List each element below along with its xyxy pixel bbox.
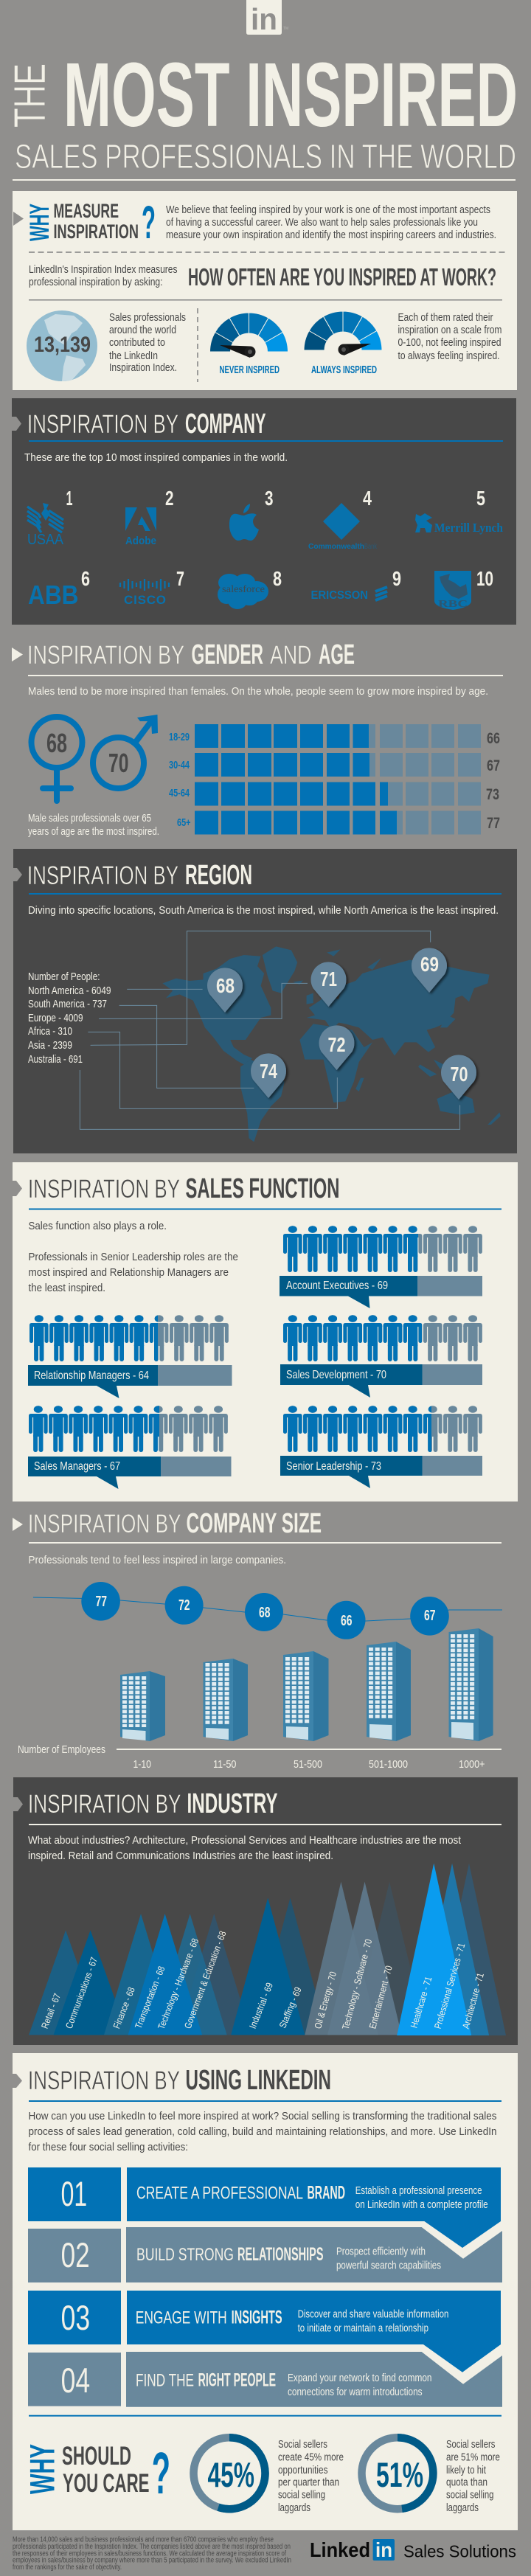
arrow — [13, 2074, 22, 2088]
pictogram: Sales Development 70 — [280, 1315, 482, 1398]
section: inspiration by gender and age — [12, 639, 503, 838]
pictogram: Account Executives 69 — [280, 1226, 482, 1308]
labels: industries: Communications - 67 — [63, 1956, 100, 2030]
text: number of people: Asia - 2399 — [28, 1039, 72, 1052]
pictogram: Sales Managers 67: Sales Managers - 67 — [34, 1460, 120, 1473]
text: rating scale: inspiration on a scale from — [398, 324, 502, 336]
text: sales function intro — [28, 1220, 238, 1294]
heading: sales function — [28, 1173, 339, 1204]
connector lines — [80, 931, 460, 1129]
point 67 — [410, 1597, 449, 1636]
text: 51% description: likely to hit — [446, 2464, 487, 2476]
step 01: CREATE A PROFESSIONAL — [136, 2184, 303, 2204]
bar row 45-64 — [169, 782, 499, 805]
panel: inspiration by sales function — [13, 1162, 518, 1501]
icon: female symbol 68 — [31, 717, 83, 801]
step 03 — [28, 2291, 501, 2372]
step 03: to initiate or maintain a relationship — [298, 2322, 428, 2335]
step 02 — [28, 2227, 502, 2282]
logo: Commonwealth Bank: Bank — [364, 542, 378, 551]
labels: industries: Staffing - 69 — [277, 1985, 304, 2030]
icon: male symbol 70 — [93, 715, 158, 788]
pin: Asia 69: 69 — [420, 953, 439, 976]
text: industry intro: inspired. Retail and Communications Industries are the least inspired. — [28, 1850, 333, 1862]
text: index description — [29, 263, 177, 288]
logo: Cisco — [120, 579, 169, 607]
logo: LinkedIn Sales Solutions — [310, 2538, 516, 2561]
text: sales professionals: the LinkedIn — [109, 350, 158, 362]
step 01: BRAND — [307, 2183, 345, 2204]
axis labels: 51-500 — [294, 1758, 322, 1771]
axis labels: 501-1000 — [369, 1758, 408, 1771]
building 1000+ — [448, 1628, 493, 1741]
labels: industries: Oil & Energy - 70 — [312, 1971, 339, 2030]
heading: gender and age: AND — [270, 641, 311, 670]
logo: Merrill Lynch — [415, 513, 503, 535]
point 66 — [327, 1601, 366, 1639]
heading: region: INSPIRATION BY — [27, 861, 178, 890]
pin: Africa 72 — [319, 1025, 354, 1070]
text: rating scale: 0-100, not feeling inspired — [398, 336, 502, 349]
text: index description: LinkedIn's Inspiration Index measures — [29, 263, 177, 276]
pin: Europe 71: 71 — [320, 968, 337, 990]
donut: 51% — [361, 2437, 434, 2509]
bar row 30-44 — [169, 753, 500, 777]
logo: Commonwealth Bank: Commonwealth — [308, 542, 364, 551]
logo: Adobe — [125, 507, 156, 547]
building 1-10 — [120, 1671, 165, 1741]
rank 7: 7 — [176, 567, 184, 590]
text: methodology note: the responses of their employees in sales/business functions. We calculated the average inspiration score of — [13, 2549, 286, 2558]
pictogram: Account Executives 69: Account Executives - 69 — [286, 1280, 388, 1292]
axis labels: 1000+ — [459, 1758, 485, 1771]
line chart — [33, 1582, 502, 1639]
building 11-50 — [204, 1659, 248, 1741]
pin: South America 74 — [251, 1053, 286, 1098]
heading: why measure inspiration: INSPIRATION — [53, 221, 139, 243]
pin: Australia 70: 70 — [450, 1063, 468, 1086]
logo: ABB: ABB — [28, 580, 78, 610]
text: 51% description — [446, 2438, 500, 2514]
section: inspiration by company size — [13, 1508, 502, 1771]
panel: inspiration by industry — [13, 1777, 518, 2045]
step 02: powerful search capabilities — [336, 2260, 441, 2272]
gauge: always inspired: ALWAYS INSPIRED — [311, 364, 377, 376]
text: 45% description: social selling — [278, 2489, 325, 2502]
point 77 — [81, 1582, 120, 1621]
heading: why measure inspiration — [24, 197, 156, 249]
panel: inspiration by company — [12, 398, 516, 625]
text: sales function intro: the least inspired. — [28, 1282, 105, 1294]
text: number of people: South America - 737 — [28, 998, 107, 1010]
text: methodology note: More than 14,000 sales and business professionals and more than 6700 companies who employ these — [13, 2536, 274, 2544]
heading: company size: INSPIRATION BY — [28, 1510, 181, 1538]
text: sales function intro: most inspired and Relationship Managers are — [28, 1266, 229, 1279]
donut: 45% — [193, 2437, 266, 2509]
heading: using linkedin: USING LINKEDIN — [186, 2065, 331, 2096]
heading: why should you care: WHY — [22, 2444, 62, 2494]
icon: LinkedIn logo: in — [251, 2, 277, 36]
text: sales function intro: Sales function also plays a role. — [28, 1220, 167, 1232]
donut: 51%: 51% — [376, 2455, 423, 2494]
step 04: RIGHT PEOPLE — [198, 2370, 276, 2391]
gauge: never inspired: NEVER INSPIRED — [220, 364, 280, 376]
icon: male symbol 70: 70 — [108, 748, 128, 778]
text: company size intro: Professionals tend to feel less inspired in large companies. — [28, 1554, 286, 1566]
point 72: 72 — [178, 1597, 190, 1614]
labels: industries: Government & Education - 68 — [182, 1929, 229, 2030]
heading: region: REGION — [185, 860, 252, 891]
text: industry intro: What about industries? Architecture, Professional Services and Healthcare industries are the most — [28, 1834, 462, 1847]
panel: why measure inspiration — [13, 191, 517, 390]
icon: LinkedIn logo: TM — [283, 27, 288, 31]
panel: inspiration by using linkedin — [13, 2053, 518, 2530]
pin: Australia 70 — [441, 1055, 476, 1100]
axis labels: 11-50 — [213, 1758, 236, 1771]
text: rating scale — [398, 311, 502, 362]
icon: LinkedIn logo — [246, 0, 288, 36]
heading: gender and age: GENDER — [192, 639, 263, 670]
heading: company: INSPIRATION BY — [27, 410, 178, 439]
step 01: Establish a professional presence — [355, 2184, 482, 2197]
logo: Ericsson: ERICSSON — [311, 589, 368, 602]
rank 10: 10 — [476, 567, 493, 590]
point 67: 67 — [424, 1608, 435, 1624]
text: 45% description: opportunities — [278, 2464, 327, 2476]
step 04 — [28, 2352, 502, 2407]
text: number of people: Europe - 4009 — [28, 1012, 83, 1024]
arrow — [13, 1181, 22, 1196]
step 02: BUILD STRONG — [136, 2245, 234, 2265]
icon: globe with number: 13,139 — [34, 333, 91, 357]
step 04: Expand your network to find common — [288, 2372, 432, 2384]
icon: female symbol 68: 68 — [46, 728, 67, 758]
text: male over 65: years of age are the most inspired. — [28, 825, 159, 838]
logo: LinkedIn Sales Solutions: Linked — [310, 2538, 370, 2561]
heading: why measure inspiration: MEASURE — [53, 200, 119, 222]
step 04: connections for warm introductions — [288, 2386, 423, 2398]
logo: Salesforce — [218, 574, 268, 609]
map: world — [162, 946, 501, 1142]
pictogram: Senior Leadership 73: Senior Leadership - 73 — [286, 1460, 381, 1473]
chart: age bars — [169, 724, 500, 835]
text: axis label: Number of Employees — [18, 1743, 105, 1756]
point 77: 77 — [96, 1594, 107, 1610]
text: number of people: North America - 6049 — [28, 985, 111, 997]
heading: sales function: SALES FUNCTION — [186, 1173, 339, 1204]
bar row 65+ — [177, 811, 500, 835]
bar row 65+: 65+ — [177, 816, 191, 829]
text: sales function intro: Professionals in Senior Leadership roles are the — [28, 1251, 238, 1263]
bar row 30-44: 30-44 — [169, 759, 190, 771]
heading: why should you care: SHOULD — [62, 2442, 131, 2471]
text: 45% description: per quarter than — [278, 2476, 339, 2489]
labels: industries: Technology - Hardware - 68 — [156, 1937, 201, 2031]
arrow — [13, 1797, 23, 1811]
logo: Commonwealth Bank — [308, 503, 378, 551]
step 02: Prospect efficiently with — [336, 2246, 426, 2258]
rank 6: 6 — [81, 567, 90, 590]
text: 51% description: are 51% more — [446, 2451, 500, 2464]
step 01 — [28, 2167, 501, 2248]
pictogram: Sales Development 70: Sales Development - 70 — [286, 1369, 386, 1381]
rank 1: 1 — [66, 487, 72, 510]
panel: inspiration by region — [13, 849, 517, 1153]
logo: RBC — [434, 571, 471, 610]
gauge: never inspired — [209, 313, 288, 376]
bar row 45-64: 73 — [486, 786, 499, 803]
labels: industries: Entertainment - 70 — [367, 1965, 395, 2030]
rank 9: 9 — [392, 567, 401, 590]
step 04: FIND THE — [136, 2371, 194, 2391]
text: 45% description — [278, 2438, 344, 2514]
text: male over 65: Male sales professionals over 65 — [28, 812, 151, 824]
heading: why should you care — [22, 2440, 170, 2506]
panel: why measure inspiration: ? — [142, 197, 156, 249]
axis labels — [133, 1758, 485, 1771]
heading: using linkedin: INSPIRATION BY — [28, 2066, 180, 2095]
text: 45% description: Social sellers — [278, 2438, 327, 2451]
heading: why should you care: YOU CARE — [63, 2469, 149, 2498]
heading: gender and age: INSPIRATION BY — [27, 641, 184, 670]
heading: why should you care: ? — [152, 2440, 170, 2506]
text: 45% description: create 45% more — [278, 2451, 344, 2464]
step 01: 01 — [61, 2174, 87, 2213]
point 68: 68 — [259, 1605, 270, 1621]
text: company intro: These are the top 10 most inspired companies in the world. — [24, 451, 288, 464]
point 72 — [165, 1586, 204, 1625]
pin: Africa 72: 72 — [327, 1033, 345, 1056]
step 04: 04 — [61, 2361, 90, 2400]
step 01: on LinkedIn with a complete profile — [355, 2198, 488, 2211]
text: sales professionals: Sales professionals — [109, 311, 186, 324]
pictogram: Relationship Managers 64: Relationship Managers - 64 — [34, 1369, 149, 1382]
building 51-500 — [283, 1651, 329, 1741]
point 68 — [245, 1593, 283, 1631]
heading: using linkedin — [28, 2065, 331, 2096]
bar row 30-44: 67 — [487, 757, 500, 774]
logo: Ericsson — [311, 587, 387, 602]
text: index description: professional inspiration by asking: — [29, 276, 162, 288]
heading: industry: INDUSTRY — [187, 1788, 277, 1819]
heading: company size — [28, 1508, 322, 1539]
logo: Adobe: Adobe — [125, 535, 156, 547]
pictogram: Sales Managers 67 — [28, 1406, 232, 1489]
text: 51% description: Social sellers — [446, 2438, 495, 2451]
logo: USAA: USAA — [27, 532, 64, 548]
text: methodology note: from the rankings for the sake of objectivity. — [13, 2563, 122, 2572]
arrow — [12, 417, 21, 431]
text: linkedin intro — [28, 2110, 497, 2153]
step 03: ENGAGE WITH — [136, 2308, 227, 2328]
axis labels: 1-10 — [133, 1758, 151, 1771]
gauge: always inspired — [304, 311, 382, 376]
text: number of people: Australia - 691 — [28, 1053, 83, 1066]
labels: industries — [39, 1929, 486, 2031]
bar row 18-29: 18-29 — [169, 731, 190, 743]
arrow — [13, 212, 24, 226]
logo: RBC: RBC — [438, 599, 468, 610]
text: methodology note: employees in sales/business by company where more than 5 participated in the survey. We excluded LinkedIn — [13, 2557, 291, 2565]
text: industry intro — [28, 1834, 462, 1862]
labels: industries: Retail - 67 — [39, 1992, 63, 2030]
footer — [13, 2536, 516, 2572]
pin: Asia 69 — [412, 948, 447, 993]
text: 51% description: laggards — [446, 2502, 479, 2514]
labels: industries: Finance - 68 — [111, 1985, 137, 2030]
heading: company: COMPANY — [185, 409, 266, 440]
rank 5: 5 — [476, 487, 485, 510]
header — [5, 0, 518, 176]
pin: South America 74: 74 — [260, 1060, 277, 1083]
heading: company size: COMPANY SIZE — [186, 1508, 322, 1539]
arrow — [13, 868, 22, 881]
heading: gender and age — [27, 639, 355, 670]
step 03: INSIGHTS — [232, 2308, 282, 2328]
rank 8: 8 — [273, 567, 282, 590]
heading: why measure inspiration: WHY — [24, 204, 55, 241]
labels: industries: Transportation - 68 — [133, 1965, 167, 2030]
labels: industries: Technology - Software - 70 — [340, 1938, 374, 2030]
text: number of people: Africa - 310 — [28, 1025, 72, 1038]
step 02: RELATIONSHIPS — [237, 2244, 323, 2265]
building 501-1000 — [367, 1642, 411, 1741]
step 03: 03 — [61, 2298, 90, 2337]
arrow — [13, 1518, 23, 1531]
heading: gender and age: AGE — [319, 639, 355, 670]
pin: North America 68 — [207, 968, 243, 1013]
text: sales professionals: around the world — [109, 324, 176, 336]
text: rating scale: Each of them rated their — [398, 311, 493, 324]
step 02: 02 — [61, 2235, 90, 2274]
pin: Europe 71 — [311, 962, 347, 1007]
text: male over 65 — [28, 812, 159, 838]
heading: sales function: INSPIRATION BY — [28, 1175, 180, 1204]
text: sales professionals: contributed to — [109, 336, 165, 349]
labels: industries: Architecture - 71 — [460, 1972, 486, 2030]
bar row 18-29 — [169, 724, 500, 748]
chart: industry triangles — [29, 1864, 506, 2035]
text: gender intro: Males tend to be more inspired than females. On the whole, people seem to grow more inspired by age. — [28, 685, 488, 698]
labels: industries: Healthcare - 71 — [409, 1975, 434, 2030]
logo: USAA — [27, 503, 64, 548]
text: 51% description: quota than — [446, 2476, 487, 2489]
labels: industries: Industrial - 69 — [247, 1981, 275, 2030]
bar row 65+: 77 — [487, 815, 500, 832]
text: methodology note — [13, 2536, 291, 2572]
text: methodology note: professionals participated in the Inspiration Index. The companies listed above are the most inspired based on — [13, 2543, 291, 2551]
text: number of people — [28, 971, 111, 1066]
text: linkedin intro: for these four social selling activities: — [28, 2141, 188, 2153]
text: intro paragraph — [166, 204, 496, 241]
pin: North America 68: 68 — [216, 974, 235, 997]
pictogram: Senior Leadership 73 — [280, 1406, 482, 1488]
bar row 18-29: 66 — [487, 730, 500, 747]
arrow — [12, 648, 23, 662]
icon: globe with number — [27, 310, 97, 381]
title: THE: THE — [5, 63, 55, 128]
text: sales professionals — [109, 311, 186, 374]
text: sales professionals: Inspiration Index. — [109, 361, 177, 374]
text: rating scale: to always feeling inspired. — [398, 350, 500, 362]
text: number of people: Number of People: — [28, 971, 100, 983]
heading: industry: INSPIRATION BY — [28, 1790, 181, 1819]
rank 4: 4 — [363, 487, 372, 510]
donut: 45%: 45% — [208, 2455, 254, 2494]
rank 2: 2 — [165, 487, 174, 510]
logo: Salesforce: salesforce — [222, 584, 265, 595]
logo: Merrill Lynch: Merrill Lynch — [434, 521, 503, 535]
rank 3: 3 — [265, 487, 273, 510]
logo: Cisco: CISCO — [124, 593, 166, 607]
logo: LinkedIn Sales Solutions: in — [375, 2538, 392, 2561]
labels: industries: Professional Services - 71 — [432, 1942, 467, 2030]
text: 51% description: social selling — [446, 2489, 494, 2502]
logo: Apple — [229, 504, 259, 541]
logo: LinkedIn Sales Solutions: Sales Solutions — [403, 2542, 516, 2561]
text: 45% description: laggards — [278, 2502, 310, 2514]
step 03: Discover and share valuable information — [298, 2308, 448, 2321]
bar row 45-64: 45-64 — [169, 787, 190, 799]
pictogram: Relationship Managers 64 — [28, 1315, 232, 1398]
point 66: 66 — [341, 1613, 353, 1629]
